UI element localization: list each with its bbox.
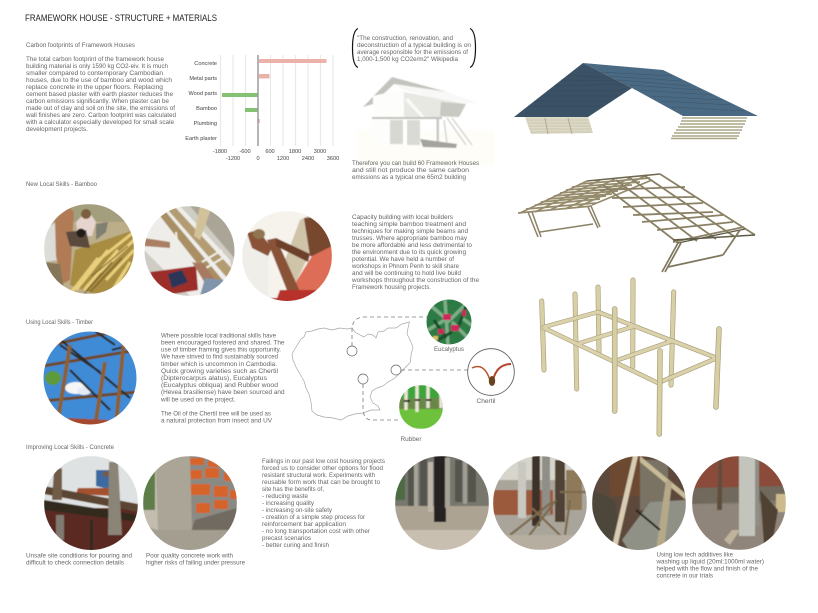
text block: failings and benefits: resistant structural work. Experiments with [262, 472, 376, 479]
caption: unsafe conditions: Unsafe site conditions for pouring and [26, 552, 133, 560]
axis tick labels: -1200 [226, 156, 240, 162]
right wall frame [662, 230, 740, 272]
caption: poor quality: Poor quality concrete work with [146, 552, 234, 560]
label: eucalyptus: Eucalyptus [434, 346, 464, 353]
bar: bamboo [245, 108, 258, 112]
caption: low tech additives: helped with the flow and finish of the [656, 565, 759, 572]
text block: carbon paragraph: development projects. [26, 126, 88, 133]
category labels: Metal parts [189, 76, 217, 82]
text block: timber skills: Quick growing varieties such as Chertil [161, 368, 278, 375]
roof left slope [514, 63, 632, 117]
left slope lattice [518, 176, 652, 213]
text block: carbon paragraph: with a calculator especially developed for small scale [25, 119, 175, 126]
icon: chertil seed [468, 349, 514, 395]
caption: low tech additives: washing up liquid (20ml:1000ml water) [655, 558, 764, 565]
text block: sixty houses [352, 160, 479, 181]
photo: timber brace and concrete base [592, 456, 686, 552]
illustration: timber post and beam frame [542, 280, 719, 434]
text block: failings and benefits: - creation of a simple step process for [262, 514, 365, 521]
bar: plumbing [258, 119, 260, 123]
bar: wood parts [222, 93, 258, 97]
photo: rubber trees [399, 385, 443, 429]
text block: failings and benefits: precast scenarios [262, 535, 311, 542]
eave beams [673, 229, 755, 243]
text block: capacity building: techniques for making simple beams and [352, 228, 469, 235]
axis: zero line [257, 55, 259, 146]
photo: timber frame against sky [43, 327, 137, 428]
photo: eucalyptus [426, 300, 472, 344]
category labels: Bamboo [196, 106, 217, 112]
text block: timber skills: timber which is uncommon in Cambodia. [161, 361, 277, 368]
text block: capacity building [351, 214, 480, 291]
text block: capacity building: workshops throughout the construction of the [351, 277, 480, 284]
illustration: bamboo roof frame [518, 174, 755, 272]
bar: concrete [259, 59, 326, 63]
text block: timber skills: (Eucalyptus obliqua) and Rubber wood [161, 382, 279, 389]
roof right slope [583, 63, 758, 116]
caption: poor quality [146, 552, 246, 566]
heading: improving local skills concrete: Improving Local Skills - Concrete [26, 444, 115, 451]
text block: carbon paragraph: The total carbon footprint of the framework house [26, 56, 165, 63]
axis tick labels: 3600 [327, 156, 339, 162]
axis tick labels: -600 [239, 149, 251, 155]
text block: timber skills: The Oil of the Chertil tree will be used as [161, 410, 271, 418]
category labels: Plumbing [194, 121, 217, 127]
text block: failings and benefits: site has the benefits of, [262, 486, 324, 493]
illustration: exploded roof with wall panels [514, 63, 758, 138]
text block: capacity building: potential. We have held a number of [352, 256, 454, 263]
text block: carbon paragraph: made out of clay and soil on the site, the emissions of [26, 105, 175, 112]
text block: failings and benefits: - reducing waste [262, 493, 309, 500]
text block: carbon paragraph: smaller compared to contemporary Cambodian [26, 70, 164, 77]
caption: poor quality: higher risks of failing under pressure [146, 560, 246, 566]
text block: capacity building: trusses. Where appropriate bamboo may [352, 235, 468, 242]
text block: capacity building: the environment due to its quick growing [352, 249, 467, 256]
callout: wikipedia quote [352, 28, 476, 68]
text block: sixty houses: Therefore you can build 60 Framework Houses [352, 160, 479, 167]
text block: failings and benefits: - increasing on-site safety [262, 507, 333, 514]
text block: capacity building: Capacity building with local builders [352, 214, 453, 221]
bar chart: carbon by material [185, 55, 339, 162]
right slope lattice [600, 174, 755, 243]
text block: failings and benefits: - better curing and finish [262, 542, 330, 549]
ridge beam [587, 174, 660, 181]
text block: carbon paragraph: replace concrete in the upper floors. Replacing [26, 84, 164, 91]
photo: formwork with props [493, 456, 587, 550]
axis tick labels: 3000 [314, 149, 326, 155]
caption: unsafe conditions: difficult to check connection details [26, 560, 124, 566]
text block: capacity building: workshops in Phnom Penh to skill share [351, 263, 460, 270]
text block: carbon paragraph [25, 56, 177, 133]
axis tick labels: 1800 [289, 149, 301, 155]
text block: failings and benefits [262, 458, 385, 549]
text block: capacity building: and will be continuing to hold live build [352, 270, 462, 277]
text block: carbon paragraph: building material is only 1590 kg CO2-eiv. It is much [26, 63, 169, 70]
category labels: Wood parts [188, 91, 217, 97]
photo: tying bamboo [144, 206, 236, 296]
beams [544, 312, 717, 383]
caption: unsafe conditions [26, 552, 133, 566]
text block: failings and benefits: reusable form work that can be brought to [262, 479, 381, 486]
dashed leaders [352, 317, 468, 420]
illustration: white house model [356, 77, 494, 166]
text block: capacity building: be more affordable and less detrimental to [352, 242, 473, 249]
photo: worker with bamboo tool [242, 211, 332, 302]
category labels [185, 61, 217, 142]
text block: timber skills: a natural protection from insect and UV [161, 418, 273, 425]
text block: timber skills: We have strived to find sustainably sourced [161, 354, 279, 361]
rear posts [542, 280, 674, 389]
text block: failings and benefits: reinforcement bar application [262, 521, 347, 528]
text block: timber skills: Where possible local traditional skills have [161, 332, 277, 339]
axis tick labels: -1800 [213, 149, 227, 155]
photo: finished concrete column [692, 456, 786, 550]
photo: poor quality concrete [143, 456, 237, 552]
callout: wikipedia quote: deconstruction of a typical building is on [357, 42, 472, 49]
front posts [615, 309, 719, 434]
title: FRAMEWORK HOUSE - STRUCTURE + MATERIALS [25, 13, 217, 23]
heading: carbon footprints: Carbon footprints of Framework Houses [26, 42, 135, 49]
caption: low tech additives [655, 551, 764, 579]
text block: timber skills: been encouraged fostered and shared. The [161, 340, 285, 346]
text block: timber skills: (Hevea brasiliense) have been sourced and [161, 389, 285, 396]
callout: wikipedia quote: 1,000-1,500 kg CO2e/m2" Wikipedia [357, 56, 459, 63]
category labels: Concrete [194, 61, 217, 67]
panel: carbon footprint text [25, 42, 177, 133]
photo: workers on bamboo [44, 204, 134, 294]
text block: timber skills [160, 332, 285, 425]
bar: metal parts [259, 74, 270, 78]
axis tick labels: 1200 [277, 156, 289, 162]
text block: failings and benefits: Failings in our past low cost housing projects [262, 458, 385, 465]
text block: failings and benefits: forced us to consider other options for flood [262, 465, 384, 472]
caption: low tech additives: concrete in our trials [656, 572, 713, 579]
axis tick labels [213, 149, 339, 162]
text block: capacity building: teaching simple bamboo treatment and [352, 221, 467, 228]
text block: sixty houses: emissions as a typical one 65m2 building [352, 174, 467, 181]
text block: failings and benefits: - no long transportation cost with other [262, 528, 370, 535]
left wall frame [528, 206, 600, 237]
heading: using local skills timber: Using Local Skills - Timber [26, 319, 93, 326]
text block: carbon paragraph: wall finishes are zero. Carbon footprint was calculated [25, 112, 177, 119]
map outline [292, 322, 413, 420]
text block: timber skills: (Dipterocarpus alatus), Eucalyptus [161, 375, 267, 382]
left wall panel [525, 117, 593, 134]
photo: unsafe site conditions [44, 456, 138, 552]
text block: carbon paragraph: houses, due to the use of bamboo and wood which [26, 77, 173, 84]
photo: formwork columns on gravel [395, 456, 489, 552]
label: rubber: Rubber [400, 436, 422, 443]
category labels: Earth plaster [185, 136, 217, 142]
axis tick labels: 0 [256, 156, 260, 162]
text block: carbon paragraph: carbon emissions significantly. When plaster can be [26, 98, 170, 105]
location markers [347, 346, 401, 384]
label: chertil: Chertil [476, 398, 496, 405]
text block: timber skills: will be used on the project. [160, 396, 236, 403]
text block: sixty houses: and still not produce the same carbon [352, 167, 470, 174]
caption: low tech additives: Using low tech additives like [656, 551, 734, 558]
text block: carbon paragraph: cement based plaster with earth plaster reduces the [26, 91, 174, 98]
callout: wikipedia quote: "The construction, renovation, and [357, 35, 454, 42]
map: cambodia with source locations [292, 317, 468, 420]
right wall panel [671, 118, 747, 138]
text block: timber skills: use of timber framing gives this opportunity. [161, 347, 281, 354]
heading: new local skills bamboo: New Local Skills - Bamboo [26, 181, 98, 188]
axis tick labels: 600 [265, 149, 275, 155]
text block: capacity building: Framework housing projects. [352, 284, 431, 291]
text block: failings and benefits: - increasing quality [262, 500, 315, 507]
callout: wikipedia quote: average responsible for the emissions of [357, 49, 468, 56]
axis tick labels: 2400 [302, 156, 314, 162]
